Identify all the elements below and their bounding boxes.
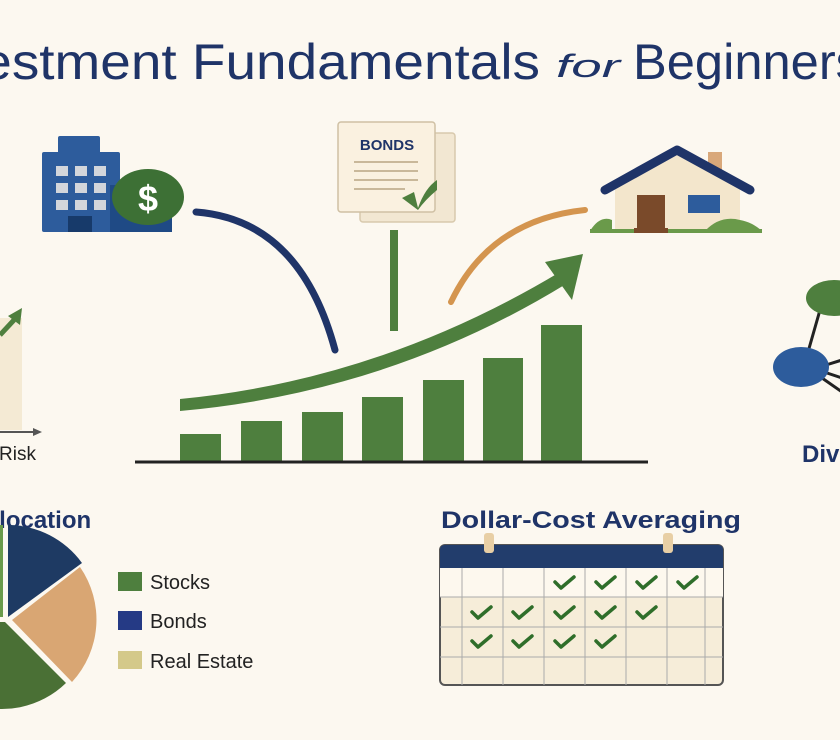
icon: house bbox=[590, 150, 762, 233]
legend bbox=[118, 572, 253, 673]
legend: Bonds bbox=[150, 611, 207, 633]
icon: diversification network bbox=[773, 280, 840, 468]
title bbox=[0, 34, 840, 90]
chart: risk vs return (partial): Risk bbox=[0, 444, 36, 465]
green vertical bar bbox=[390, 230, 398, 331]
chart: risk vs return (partial) bbox=[0, 308, 42, 465]
pie chart bbox=[0, 525, 96, 709]
icon: bonds document: BONDS bbox=[360, 137, 414, 154]
legend: Real Estate bbox=[150, 651, 253, 673]
title: for bbox=[556, 48, 622, 84]
arrow: growth bbox=[180, 254, 583, 411]
icon: bonds document bbox=[338, 122, 455, 222]
arrow: orange arc bbox=[451, 210, 585, 302]
arrow: navy arc bbox=[196, 212, 335, 350]
heading: dollar-cost averaging: Dollar-Cost Averaging bbox=[441, 507, 741, 534]
icon: building with dollar bbox=[42, 136, 184, 232]
legend: Stocks bbox=[150, 572, 210, 594]
icon: building with dollar: $ bbox=[138, 178, 158, 219]
calendar bbox=[440, 533, 723, 685]
bar chart: growth bbox=[135, 254, 648, 462]
